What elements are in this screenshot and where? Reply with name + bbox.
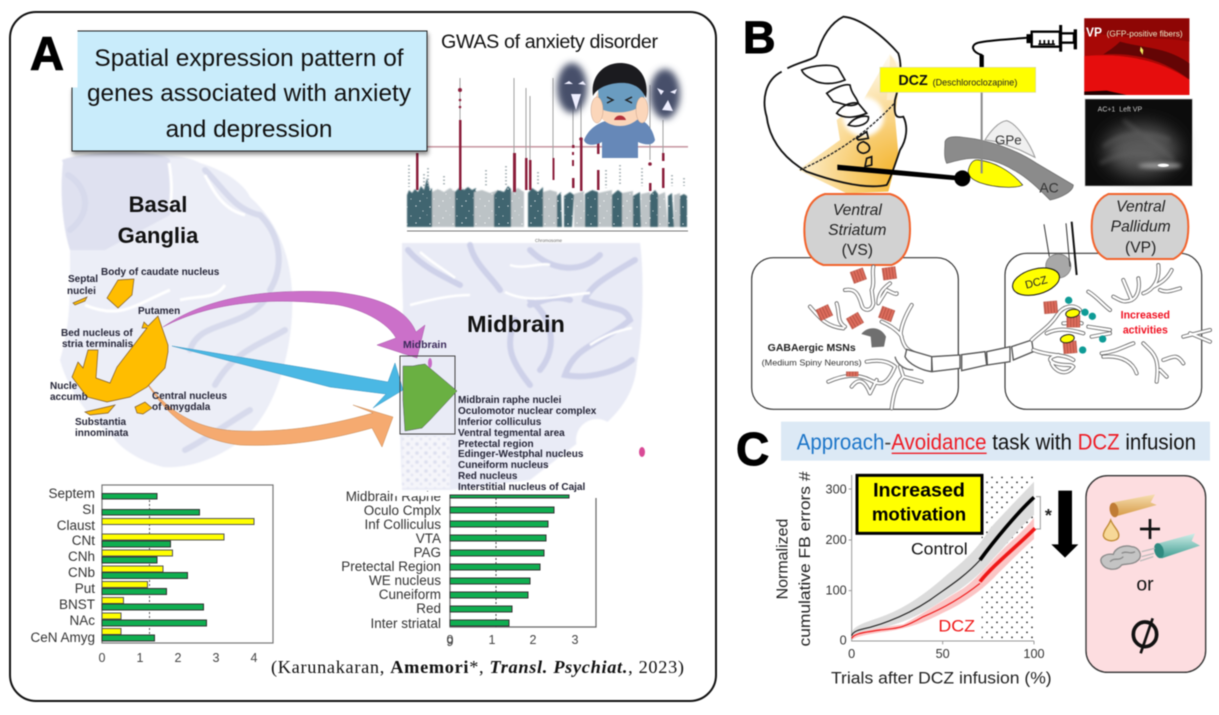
callout: increased motivation: motivation (872, 504, 966, 525)
axis caption: Chromosome (535, 238, 563, 243)
row labels: Oculo Cmplx (364, 503, 441, 518)
neuron: VP dendrites (1032, 265, 1210, 382)
row labels: VTA (416, 531, 441, 546)
x axis ticks (99, 651, 258, 665)
infusion cannula (1044, 222, 1077, 278)
region: amygdala (135, 402, 152, 414)
inset frame (400, 356, 455, 434)
y ticks: 300 (826, 483, 847, 497)
x axis ticks: 1 (137, 651, 144, 665)
Manhattan plot (407, 78, 688, 243)
line chart (775, 471, 1052, 688)
label: ventral pallidum: Pallidum (1111, 219, 1171, 236)
region: caudate (107, 279, 134, 308)
bars (102, 494, 254, 641)
symbol: phi (1133, 618, 1157, 653)
label: ventral pallidum (1092, 194, 1188, 259)
panel letter B: B (743, 12, 776, 63)
icon: worried person with dark spirits (557, 63, 680, 158)
row labels: Midbrain Raphe (346, 489, 441, 504)
arrow: decrease (1051, 491, 1078, 558)
bar chart: midbrain (341, 489, 596, 649)
basal ganglia labels: nuclei (67, 286, 96, 297)
gene stems (460, 78, 663, 160)
MSN label: (Medium Spiny Neurons) (762, 357, 862, 367)
hands (591, 97, 603, 123)
row labels (30, 486, 95, 645)
region: putamen and related (72, 316, 168, 402)
midbrain nuclei list: Edinger-Westphal nucleus (458, 449, 584, 460)
label: ventral striatum: Striatum (828, 222, 886, 239)
midbrain nuclei list: Pretectal region (458, 439, 534, 450)
GPe label: GPe (995, 133, 1022, 148)
scattered points (409, 165, 684, 188)
VP yellow target (968, 160, 1023, 187)
x axis ticks: 3 (572, 633, 579, 647)
icon: teal tube with smoke (1101, 533, 1200, 569)
x axis ticks: 0 (447, 633, 454, 647)
midbrain inset (400, 339, 457, 434)
y ticks: 0 (840, 633, 847, 647)
DCZ capsule: DCZ (1024, 274, 1049, 292)
cannula line (979, 90, 985, 173)
midbrain green region (403, 364, 457, 431)
panel A frame (10, 12, 716, 701)
row labels: CNb (68, 565, 95, 580)
electrode line (837, 165, 960, 181)
histology: GFP positive fibers (1084, 18, 1189, 95)
small pink region (428, 358, 432, 368)
callout: increased motivation: Increased (873, 479, 965, 501)
x axis title: Trials after DCZ infusion (%) (831, 670, 1052, 688)
section title box: Spatial expression pattern of (94, 45, 404, 72)
histology: GFP positive fibers: (GFP-positive fibers) (1107, 29, 1183, 39)
x axis ticks: 9 (447, 635, 454, 649)
heading: basal ganglia: Ganglia (118, 223, 199, 248)
neuron: axon (895, 340, 1033, 372)
box: VP neuron (1005, 253, 1202, 409)
y ticks: 100 (826, 584, 847, 598)
basal ganglia labels: Putamen (138, 306, 180, 317)
row labels: Septem (48, 486, 95, 501)
curve label: DCZ: DCZ (938, 617, 975, 636)
basal ganglia labels: Bed nucleus of (61, 328, 133, 339)
plus sign (1140, 519, 1160, 539)
heading: basal ganglia (118, 192, 199, 248)
receptors (816, 266, 1080, 376)
midbrain nuclei list: Midbrain raphe nuclei (458, 395, 562, 406)
DCZ label box (880, 67, 1036, 92)
tube to syringe (973, 38, 1028, 68)
axes (849, 475, 1034, 644)
arrow: orange (143, 377, 393, 447)
row labels: Cuneiform (379, 587, 441, 602)
DCZ label box: DCZ (898, 73, 928, 89)
x axis ticks: 3 (213, 651, 220, 665)
panel letter A: A (30, 27, 64, 80)
x axis ticks: 0 (99, 651, 106, 665)
x ticks: 0 (848, 647, 855, 661)
x axis ticks: 2 (530, 633, 537, 647)
confidence bands (852, 482, 1034, 638)
basal ganglia labels: of amygdala (152, 402, 211, 413)
point texture (407, 186, 688, 228)
DCZ label box: (Deschloroclozapine) (933, 78, 1017, 88)
panel B (743, 12, 1210, 409)
right spirit (650, 69, 680, 119)
midbrain nuclei list: Inferior colliculus (458, 417, 542, 428)
midbrain nuclei list: Cuneiform nucleus (458, 460, 549, 471)
head (595, 80, 645, 126)
DCZ bound on receptors (1060, 308, 1080, 344)
row labels: NAc (69, 613, 95, 628)
histology: MRI of left VP: AC+1 Left VP (1098, 107, 1142, 114)
basal ganglia labels (50, 267, 227, 439)
icon: syringe (1028, 25, 1075, 52)
significance bracket (1036, 497, 1040, 529)
circuit diagram, scaled group (752, 194, 1210, 409)
basal ganglia labels: accumb (50, 392, 88, 403)
left spirit (557, 63, 587, 113)
row labels: Pretectal Region (341, 559, 441, 574)
row labels: Inter striatal (370, 616, 441, 631)
GPe region (985, 121, 1035, 157)
section title box (60, 29, 427, 151)
bar chart: basal ganglia (30, 485, 273, 665)
y ticks (826, 483, 847, 647)
panel: outcome box (1086, 476, 1206, 672)
panel letter C: C (736, 423, 769, 475)
control curve (852, 560, 980, 636)
row labels: Red (416, 601, 441, 616)
x axis ticks: 1 (489, 633, 496, 647)
label: ventral striatum: Ventral (833, 202, 882, 219)
label: ventral pallidum: (VP) (1125, 239, 1156, 256)
axis (407, 230, 688, 232)
histology: GFP positive fibers: VP (1086, 26, 1103, 40)
row labels: BNST (59, 597, 95, 612)
inset label: Midbrain (403, 339, 447, 351)
list overlap mask (393, 492, 453, 496)
section title box: genes associated with anxiety (87, 80, 412, 107)
row labels: Claust (57, 518, 95, 533)
row labels: CeN Amyg (30, 630, 95, 645)
x ticks (848, 647, 1045, 661)
x axis ticks (447, 633, 579, 649)
section title box: and depression (166, 116, 332, 143)
panel C (736, 422, 1210, 688)
label: ventral pallidum: Ventral (1116, 199, 1166, 216)
bars (450, 495, 569, 626)
box: VS neuron (752, 258, 958, 409)
basal ganglia labels: Substantia (75, 417, 127, 428)
midbrain nuclei list (458, 395, 597, 493)
task title bar (781, 422, 1210, 461)
y axis title (775, 471, 814, 646)
arrow: purple (163, 291, 425, 358)
y axis title: cumulative FB errors # (797, 471, 814, 646)
midbrain nuclei list: Ventral tegmental area (458, 428, 565, 439)
panel A (10, 12, 716, 701)
basal ganglia labels: Central nucleus (152, 391, 227, 402)
row labels: Inf Colliculus (364, 517, 441, 532)
anterior commissure (945, 137, 1073, 200)
label: ventral striatum (804, 194, 910, 265)
row labels: WE nucleus (369, 573, 441, 588)
panel B anatomy, scaled group (765, 17, 1192, 200)
MSN label: GABAergic MSNs (768, 343, 856, 354)
region: substantia innominata (85, 405, 115, 415)
y ticks: 200 (826, 533, 847, 547)
midbrain nuclei list: Oculomotor nuclear complex (458, 406, 597, 417)
grey nucleus of MSN (861, 328, 886, 347)
increased activities label: activities (1123, 325, 1168, 337)
text: or: or (1136, 575, 1154, 596)
x ticks: 50 (936, 647, 950, 661)
basal ganglia labels: stria terminalis (62, 339, 134, 350)
y axis title: Normalized (775, 519, 792, 599)
basal ganglia labels: Nucle (50, 381, 78, 392)
curve label: control: Control (911, 539, 968, 558)
task title bar: Approach-Avoidance task with DCZ infusion (797, 430, 1196, 455)
electrode tip (954, 170, 970, 186)
icon: orange tube with drop (1103, 494, 1157, 541)
row labels: SI (82, 502, 95, 517)
MSN label (762, 343, 862, 367)
DCZ capsule (1010, 263, 1062, 300)
significance window (982, 477, 1034, 640)
citation: (Karunakaran, Amemori*, Transl. Psychiat., 2023) (271, 657, 684, 678)
basal ganglia labels: innominata (75, 428, 129, 439)
row labels: PAG (413, 545, 441, 560)
significant hits (416, 88, 664, 192)
body (584, 120, 655, 158)
GWAS title: GWAS of anxiety disorder (441, 31, 658, 53)
basal ganglia highlighted regions (72, 279, 168, 415)
row labels: CNt (72, 533, 95, 548)
hair (593, 63, 647, 98)
chromosome bands (407, 178, 687, 227)
increased activities label (1121, 309, 1170, 337)
arrow: blue (172, 346, 403, 408)
neurotransmitters (1065, 297, 1106, 354)
label: ventral striatum: (VS) (842, 242, 873, 259)
row labels: CNh (68, 549, 95, 564)
heading: midbrain: Midbrain (467, 311, 565, 337)
DCZ curve (852, 583, 980, 638)
x ticks: 100 (1023, 647, 1045, 661)
histology: MRI of left VP (1085, 99, 1192, 186)
brain section: midbrain (400, 243, 643, 490)
increased activities label: Increased (1121, 309, 1170, 321)
significance star: * (1045, 505, 1052, 525)
heading: basal ganglia: Basal (129, 192, 187, 217)
AC label: AC (1039, 180, 1059, 196)
brain section: basal ganglia (60, 152, 292, 467)
callout: increased motivation (857, 475, 982, 533)
x axis ticks: 4 (251, 651, 258, 665)
neuron: VS dendrites (810, 267, 922, 408)
brain slice with VP injection spread (765, 17, 906, 193)
basal ganglia labels: Body of caudate nucleus (101, 267, 220, 278)
row labels: Put (75, 581, 95, 596)
x axis ticks: 2 (175, 651, 182, 665)
significance line (427, 146, 688, 148)
pink spot (639, 447, 645, 457)
midbrain nuclei list: Red nucleus (458, 471, 518, 482)
midbrain nuclei list: Interstitial nucleus of Cajal (458, 482, 585, 493)
basal ganglia labels: Septal (68, 274, 98, 285)
region: septal (73, 297, 87, 305)
fear shading (598, 82, 645, 112)
face (607, 97, 632, 103)
row labels (341, 489, 441, 631)
